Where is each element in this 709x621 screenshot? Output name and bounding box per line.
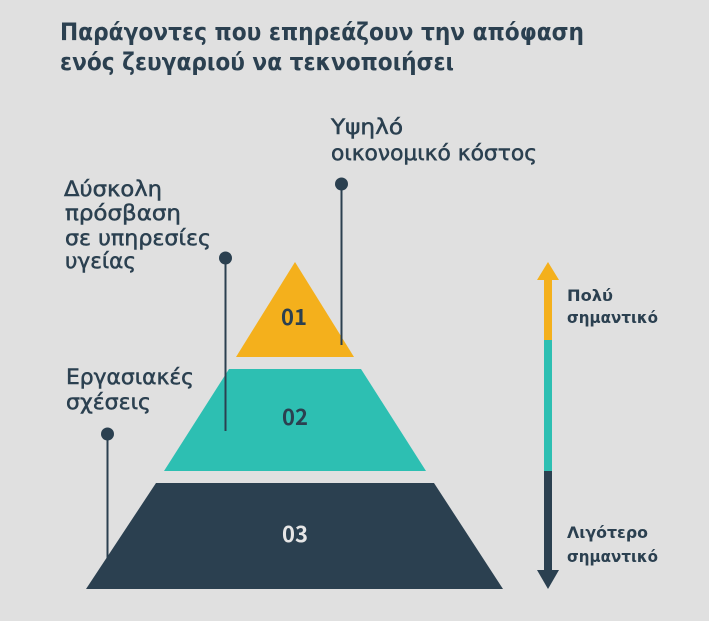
pyramid tier 03: 03: [282, 517, 308, 549]
callout: access to health services: πρόσβαση: [65, 201, 181, 225]
callout: high cost: οικονομικό κόστος: [331, 141, 537, 165]
pyramid tier 03: [86, 483, 503, 589]
pyramid tier 02: 02: [282, 400, 308, 432]
title: [60, 18, 584, 76]
pyramid tier 01: 01: [281, 300, 307, 332]
label: less important: Λιγότερο: [567, 524, 648, 542]
label: very important: Πολύ: [567, 287, 613, 305]
title: ενός ζευγαριού να τεκνοποιήσει: [60, 48, 454, 76]
callout: high cost: Υψηλό: [330, 115, 403, 139]
callout: work relations: σχέσεις: [66, 390, 151, 414]
label: less important: σημαντικό: [567, 548, 658, 566]
pyramid tier 02: [164, 369, 426, 471]
pyramid: [86, 262, 503, 589]
label: very important: [567, 287, 658, 327]
callout: high cost: [330, 115, 537, 345]
pyramid tier 01: [236, 262, 354, 357]
callout: access to health services: [64, 177, 232, 431]
importance arrow: [537, 262, 559, 589]
callout: work relations: [66, 365, 194, 560]
callout: access to health services: υγείας: [65, 249, 136, 273]
title: Παράγοντες που επηρεάζουν την απόφαση: [60, 18, 584, 46]
callout: work relations: Εργασιακές: [66, 365, 194, 389]
label: less important: [567, 524, 658, 566]
callout: access to health services: σε υπηρεσίες: [65, 226, 211, 250]
label: very important: σημαντικό: [567, 309, 658, 327]
callout: access to health services: Δύσκολη: [64, 177, 162, 201]
